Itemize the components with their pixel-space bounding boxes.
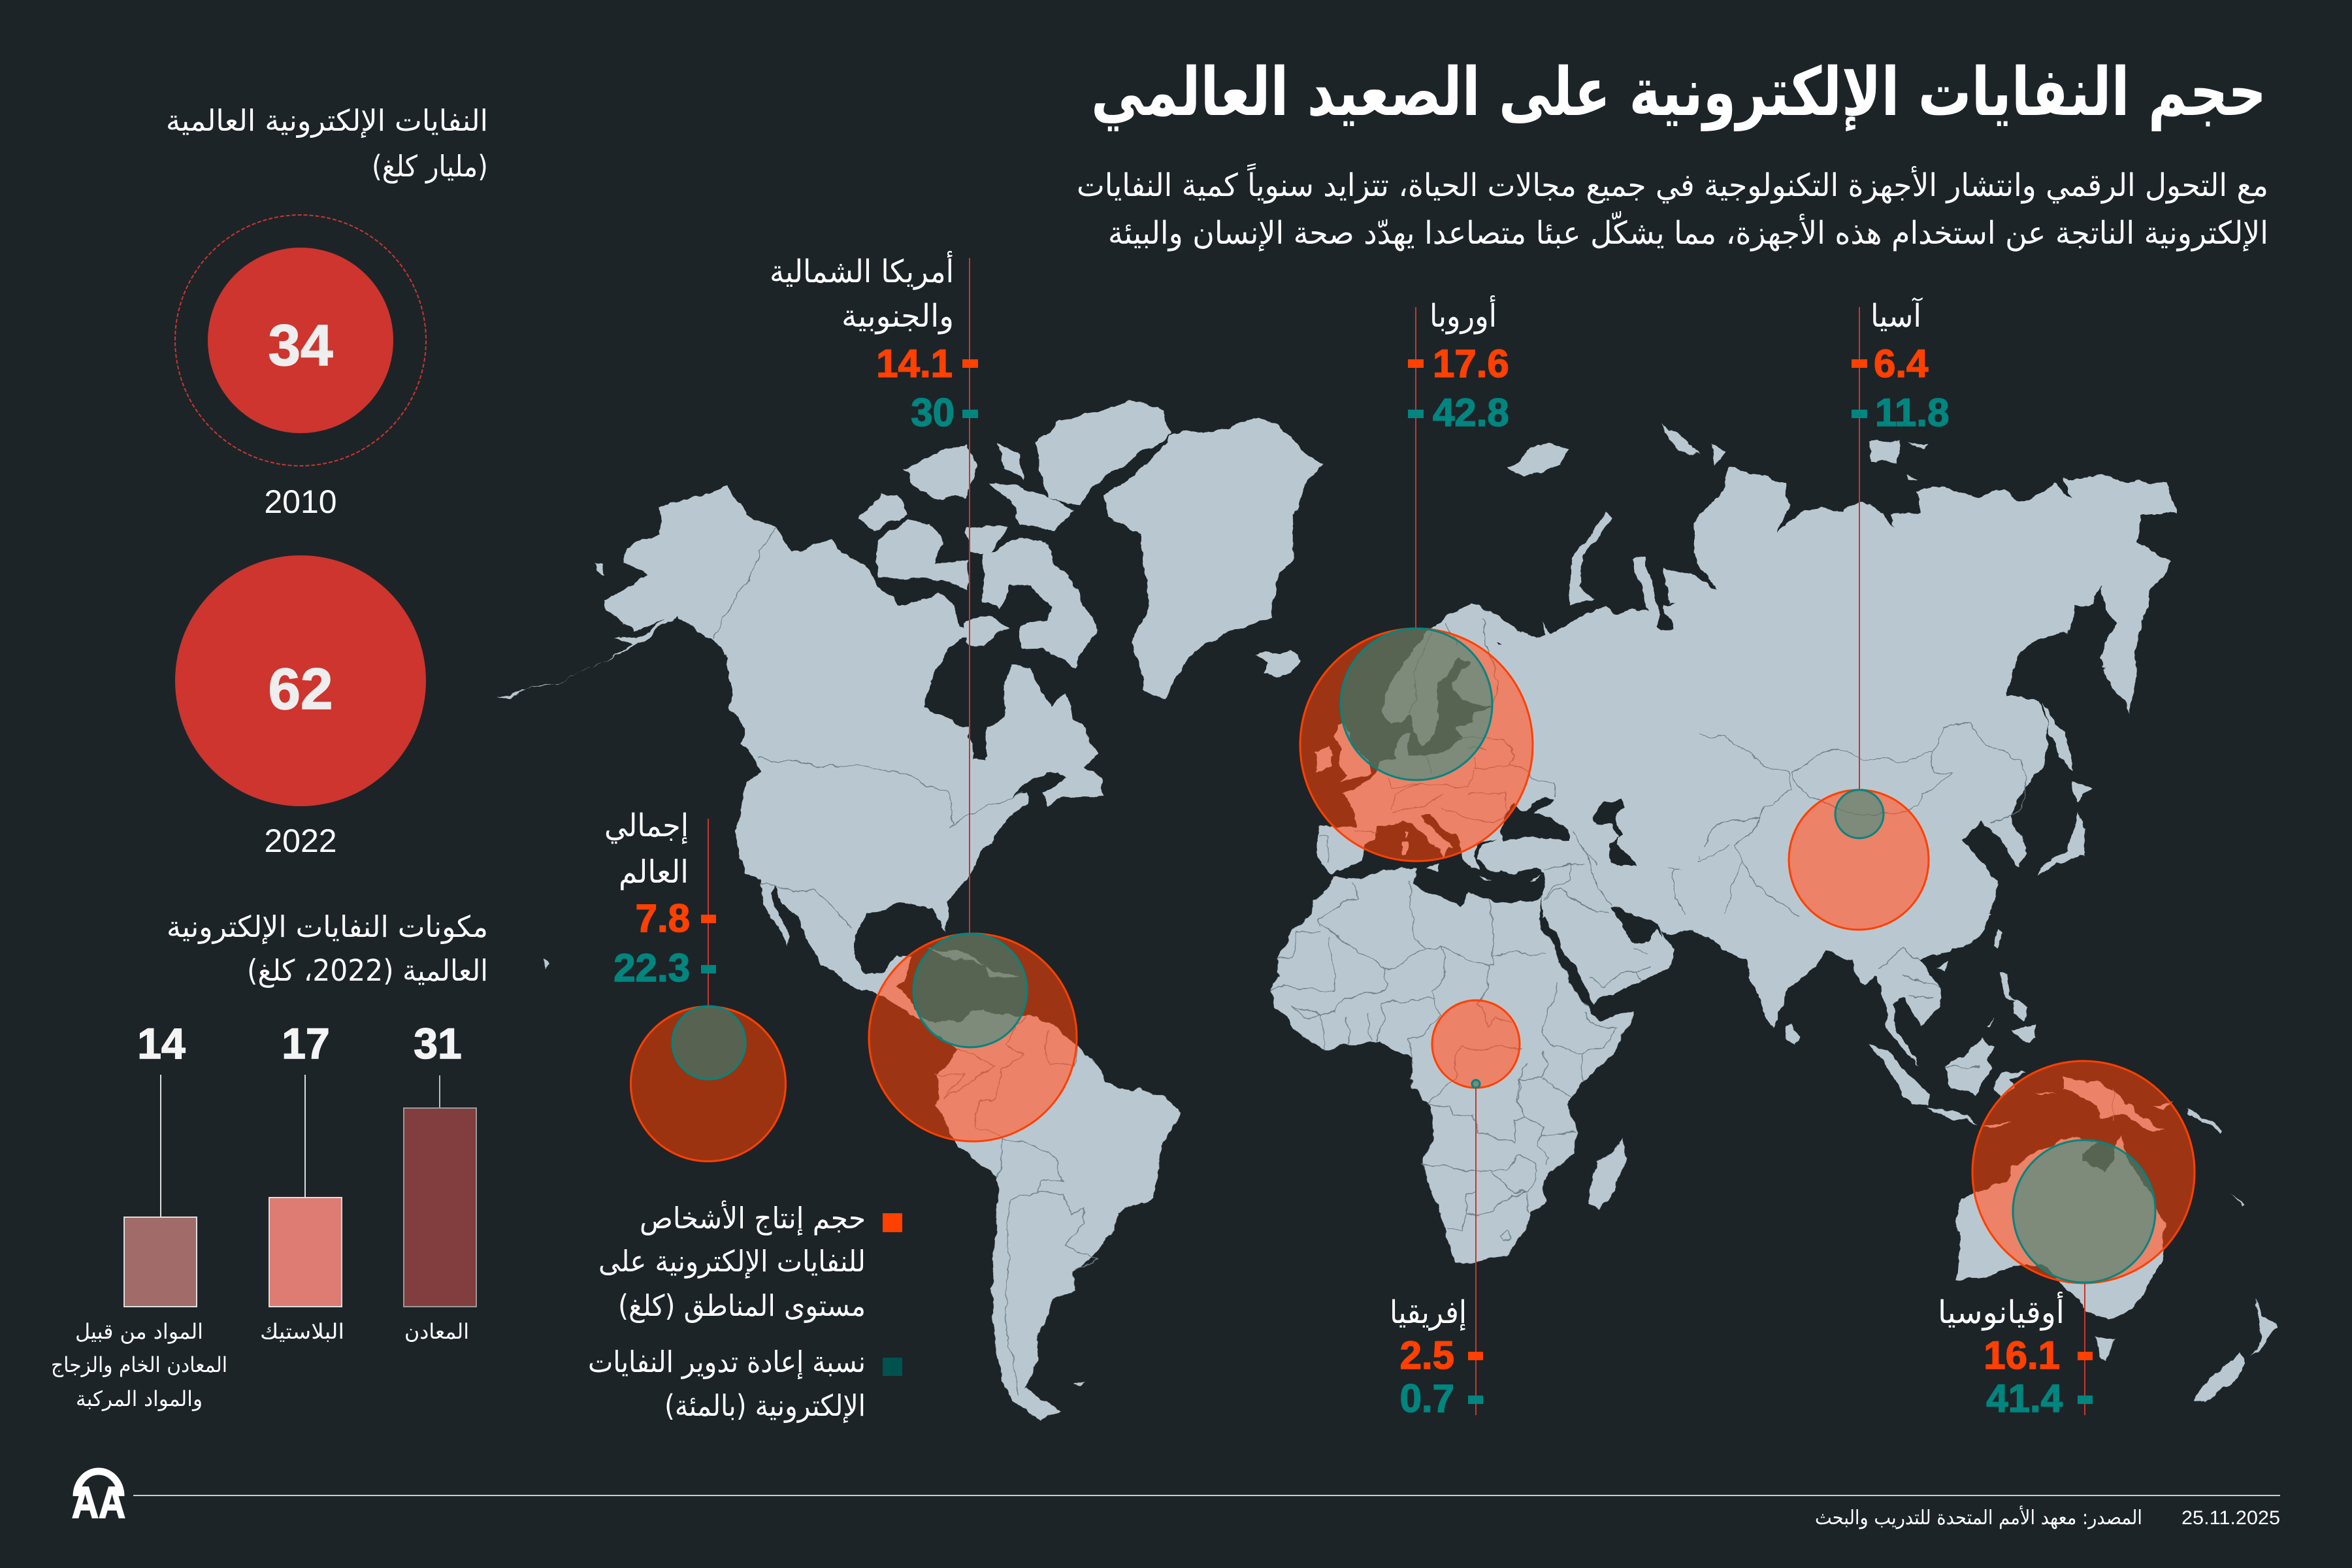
icon: AA logo: AA xyxy=(72,1478,125,1527)
legend: مستوى المناطق (كلغ) xyxy=(618,1288,866,1323)
heading: global e-waste: (مليار كلغ) xyxy=(372,149,488,184)
panel: global e-waste totals xyxy=(166,103,488,859)
date: 25.11.2025 xyxy=(2181,1507,2280,1529)
callout: North and South America: 30 xyxy=(911,391,955,434)
callout: North and South America: والجنوبية xyxy=(841,298,954,335)
callout: Africa: 0.7 xyxy=(1400,1377,1454,1420)
callout: Africa: 2.5 xyxy=(1400,1333,1454,1377)
map: South and South-East Asia and Oceania xyxy=(1666,915,2278,1401)
map: Americas and Greenland xyxy=(497,401,1322,1022)
heading: composition: مكونات النفايات الإلكترونية xyxy=(167,909,488,945)
subtitle: مع التحول الرقمي وانتشار الأجهزة التكنولوجية في جميع مجالات الحياة، تتزايد سنوياً كمية النفايات xyxy=(1077,163,2268,204)
callout: Africa: إفريقيا xyxy=(1390,1294,1467,1331)
callout: Europe: 42.8 xyxy=(1433,391,1509,434)
heading: global e-waste xyxy=(166,103,488,184)
circle: 2022: 2022 xyxy=(264,823,337,859)
callout: Asia: 6.4 xyxy=(1874,342,1929,385)
callout: North and South America: 14.1 xyxy=(876,342,953,385)
callout: World total: 22.3 xyxy=(613,946,690,990)
callout: Oceania: 16.1 xyxy=(1984,1333,2060,1377)
circle: 2010: 34 xyxy=(268,312,333,378)
subtitle: الإلكترونية الناتجة عن استخدام هذه الأجهزة، مما يشكّل عبئا متصاعدا يهدّد صحة الإنسان والبيئة xyxy=(1108,211,2268,252)
circle: 2010 xyxy=(175,215,426,520)
bar: plastics 17 xyxy=(260,1019,344,1344)
bar: metals 31: المعادن xyxy=(404,1319,469,1344)
callout: Oceania: أوقيانوسيا xyxy=(1938,1292,2065,1331)
bar: raw minerals 14: المواد من قبيل xyxy=(75,1319,203,1344)
callout: Oceania: 41.4 xyxy=(1986,1377,2063,1420)
map: Europe and Middle East xyxy=(1258,602,1699,1005)
callout: Oceania xyxy=(1938,1283,2093,1420)
map: Asia xyxy=(1495,422,2176,960)
bubbles: Oceania xyxy=(1972,1061,2195,1283)
heading: composition xyxy=(167,909,488,988)
callout: World total: 7.8 xyxy=(636,896,690,940)
footer rule xyxy=(133,1495,2280,1496)
callout: World total: العالم xyxy=(619,854,689,890)
legend xyxy=(588,1200,902,1424)
source: المصدر: معهد الأمم المتحدة للتدريب والبحث xyxy=(1815,1505,2142,1529)
heading: global e-waste: النفايات الإلكترونية العالمية xyxy=(166,103,488,139)
bubbles: Africa xyxy=(1432,1000,1520,1088)
bar: raw minerals 14 xyxy=(51,1019,227,1411)
bar: metals 31 xyxy=(404,1019,476,1344)
bar: raw minerals 14: 14 xyxy=(137,1019,186,1068)
circle: 2022: 62 xyxy=(268,656,333,721)
map: Africa xyxy=(1272,868,1633,1264)
bar: raw minerals 14: والمواد المركبة xyxy=(76,1386,203,1411)
circle: 2022 xyxy=(175,555,426,859)
callout: Europe: 17.6 xyxy=(1433,342,1509,385)
callout: Europe: أوروبا xyxy=(1429,295,1497,335)
panel: composition bars xyxy=(51,909,488,1411)
bar: metals 31: 31 xyxy=(414,1019,462,1068)
legend: للنفايات الإلكترونية على xyxy=(598,1244,866,1279)
callout: World total xyxy=(604,808,716,1006)
world map xyxy=(497,401,2278,1419)
callout: World total: إجمالي xyxy=(604,808,689,844)
heading: composition: العالمية (2022، كلغ) xyxy=(247,953,488,988)
legend: الإلكترونية (بالمئة) xyxy=(664,1388,866,1424)
callout: Asia: 11.8 xyxy=(1875,391,1949,434)
callout: Europe xyxy=(1408,295,1509,629)
bubbles: Europe xyxy=(1300,629,1533,861)
subtitle xyxy=(1077,163,2268,252)
bubbles: North and South America xyxy=(869,934,1077,1141)
callout: North and South America xyxy=(770,251,978,934)
bar: plastics 17: البلاستيك xyxy=(260,1319,344,1344)
circle: 2010: 2010 xyxy=(264,483,337,520)
legend: نسبة إعادة تدوير النفايات xyxy=(588,1345,866,1380)
bar: raw minerals 14: المعادن الخام والزجاج xyxy=(51,1352,227,1377)
bubbles: World total xyxy=(631,1006,785,1162)
bar: plastics 17: 17 xyxy=(282,1019,330,1068)
map: South America and Caribbean xyxy=(544,948,1182,1419)
callout: North and South America: أمريكا الشمالية xyxy=(770,251,954,290)
callout: Africa xyxy=(1390,1088,1483,1420)
bubbles: Asia xyxy=(1789,790,1929,930)
callout: Asia xyxy=(1852,297,1949,790)
legend: حجم إنتاج الأشخاص xyxy=(640,1200,866,1235)
callout: Asia: آسيا xyxy=(1870,297,1923,335)
